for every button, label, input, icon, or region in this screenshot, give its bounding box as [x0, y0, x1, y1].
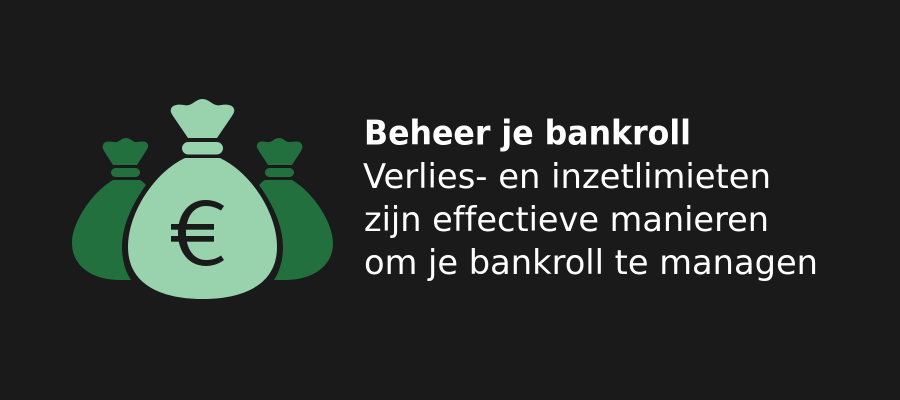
icon: three money bags [72, 99, 333, 299]
text block: message [363, 114, 818, 282]
body line 2: zijn effectieve manieren [364, 200, 769, 239]
icon: left money bag [72, 138, 148, 280]
body line 1: Verlies- en inzetlimieten [363, 157, 771, 196]
icon: euro sign [171, 200, 224, 266]
body line 3: om je bankroll te managen [364, 243, 818, 282]
icon: centre money bag [128, 99, 277, 299]
heading: Beheer je bankroll [364, 114, 691, 152]
icon: right money bag [257, 138, 333, 280]
